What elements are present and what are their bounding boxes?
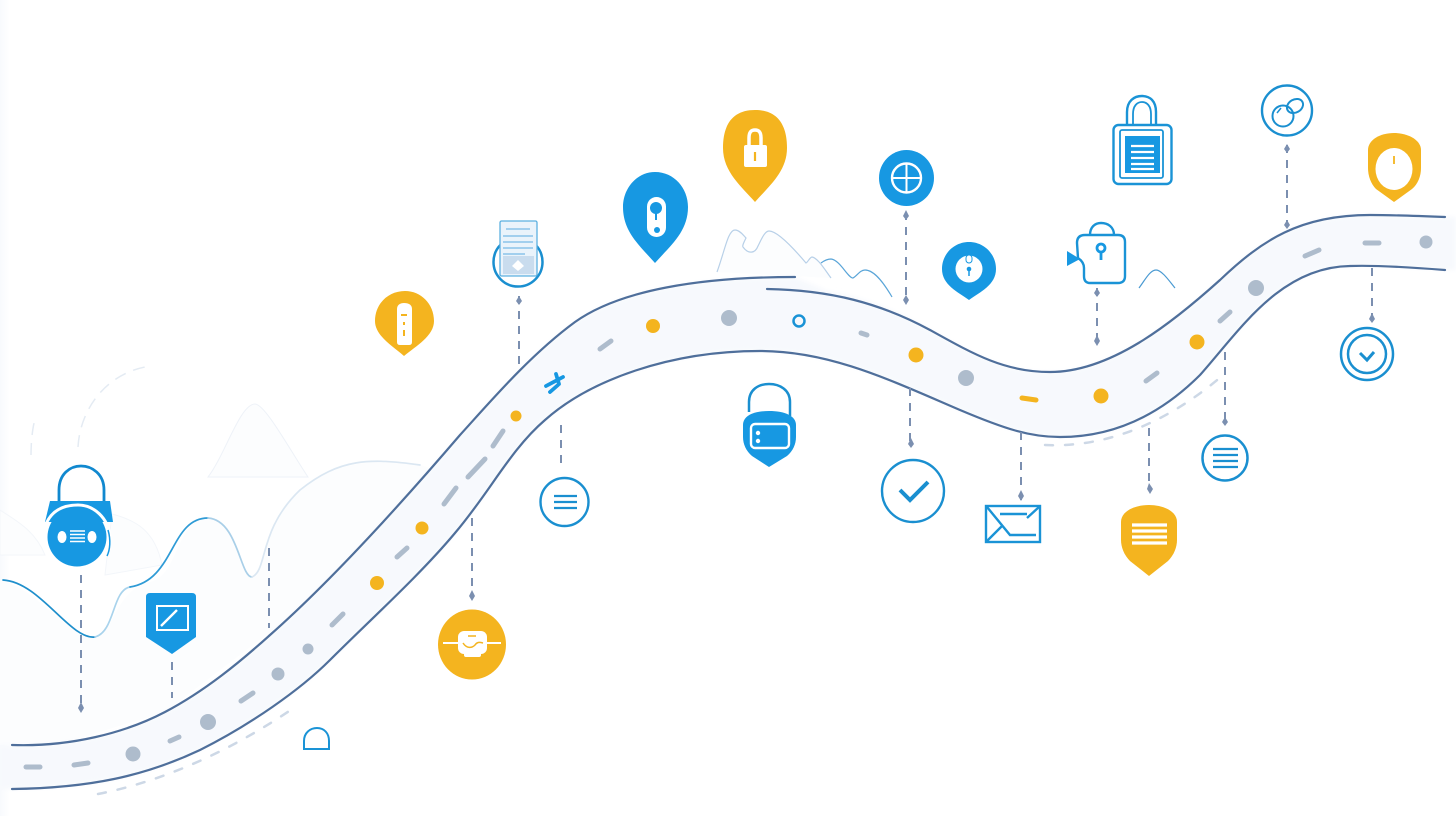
icon: blue padlock with badge <box>45 466 113 566</box>
road gray markers <box>126 236 1432 762</box>
background hills <box>0 230 1175 745</box>
icon: list circle left <box>540 478 588 526</box>
road edges <box>12 215 1445 789</box>
icon: document in circle <box>494 221 542 286</box>
pale dashed arcs <box>31 367 145 455</box>
icon: orange pin with white pill <box>375 291 434 356</box>
icon: outline circle with fruit <box>1262 86 1312 136</box>
icon: blue pin with keyhole pill <box>623 172 688 263</box>
road blue ring marker <box>794 316 804 326</box>
pale dashes below road <box>98 376 1222 794</box>
icon: blue pin with dial <box>942 242 996 300</box>
icon: orange circle device <box>438 610 506 680</box>
icon: blue shield padlock <box>743 384 796 467</box>
road orange markers <box>370 319 1204 590</box>
icon: outline arch <box>304 728 329 749</box>
icon: list circle right <box>1202 436 1248 480</box>
road surface <box>0 215 1456 789</box>
dashed connectors <box>81 145 1372 708</box>
icon: envelope <box>986 506 1040 542</box>
icon: check in double ring <box>1341 328 1393 380</box>
icon: outline padlock camera <box>1067 223 1125 283</box>
icon: orange shield with clock <box>1368 133 1421 202</box>
icon: outline padlock with document <box>1114 96 1172 184</box>
icon: check circle <box>882 460 944 522</box>
connector arrowheads <box>78 144 1375 713</box>
icon: orange shield with lines <box>1121 505 1177 576</box>
icon: orange pin with padlock <box>723 110 787 202</box>
icon: blue circle with crosshair <box>879 150 934 206</box>
line chart curve <box>3 461 420 637</box>
road lane dashes <box>26 243 1379 767</box>
icon: blue tag with screen <box>146 593 196 654</box>
road blue glyph <box>546 374 563 392</box>
